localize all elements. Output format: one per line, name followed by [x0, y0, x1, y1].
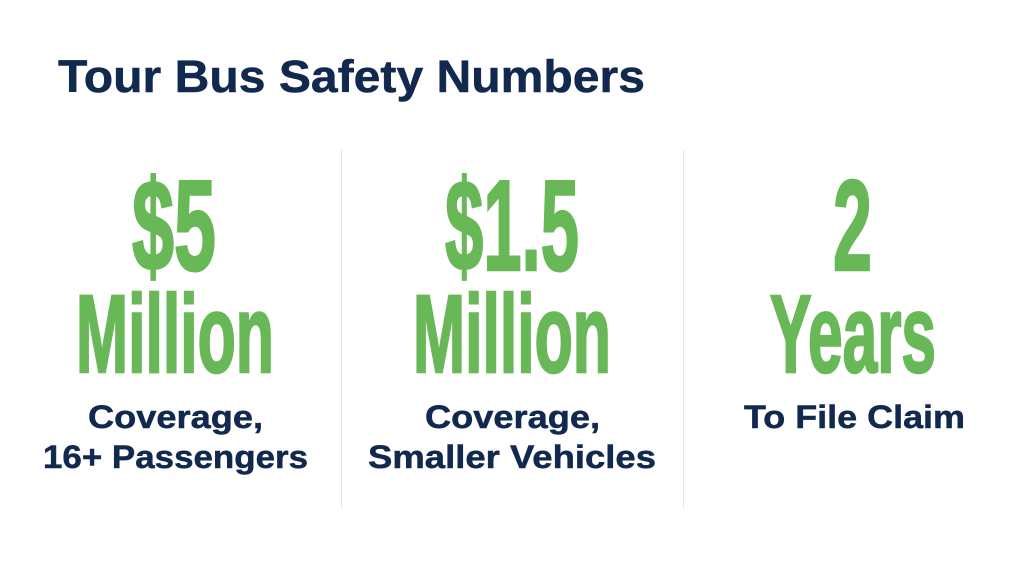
stat description	[368, 399, 656, 475]
stat value: $5: $5	[132, 154, 216, 298]
panel: 2 years to file claim	[744, 154, 965, 435]
stat value: 2: 2	[833, 154, 872, 298]
title: Tour Bus Safety Numbers	[58, 51, 645, 102]
stat unit: Million: Million	[76, 273, 274, 396]
panel: $5 million coverage	[43, 154, 308, 475]
stat description: Coverage,	[88, 399, 263, 435]
stat value: $1.5: $1.5	[445, 154, 579, 298]
stat unit: Million: Million	[413, 273, 611, 396]
panel: $1.5 million coverage	[368, 154, 656, 475]
stat description: Coverage,	[425, 399, 600, 435]
stat description: To File Claim	[744, 399, 965, 435]
stat description: 16+ Passengers	[43, 439, 308, 475]
stat description: Smaller Vehicles	[368, 439, 656, 475]
stat description	[43, 399, 308, 475]
